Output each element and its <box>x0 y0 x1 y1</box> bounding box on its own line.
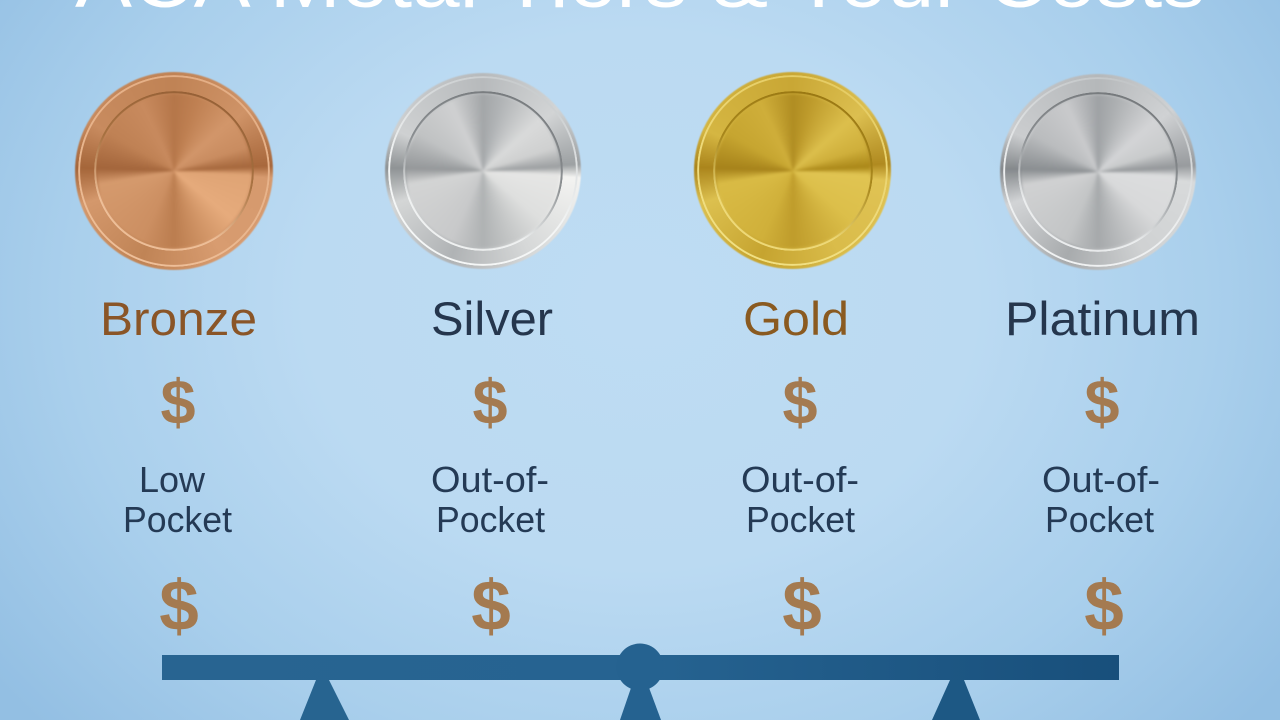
tier name: Platinum: Platinum <box>1005 292 1200 345</box>
right support <box>932 680 980 720</box>
cost label: Platinum: Pocket <box>1045 499 1154 540</box>
premium dollar: Bronze: $ <box>160 368 196 438</box>
premium dollar: Silver: $ <box>472 368 508 438</box>
tier name: Silver: Silver <box>431 292 553 345</box>
tier name: Bronze: Bronze <box>100 292 257 345</box>
coin: silver <box>384 72 582 270</box>
cost label: Platinum: Out-of- <box>1042 459 1160 500</box>
premium dollar: Gold: $ <box>782 368 818 438</box>
premium dollar: Platinum: $ <box>1084 368 1120 438</box>
cost label: Bronze: Pocket <box>123 499 232 540</box>
scale dollar: Silver: $ <box>471 567 511 646</box>
cost label: Silver <box>431 459 549 540</box>
cost label: Silver: Pocket <box>436 499 545 540</box>
coin: bronze <box>74 71 274 271</box>
left support <box>300 680 349 720</box>
cost label: Gold: Out-of- <box>741 459 859 500</box>
cost label: Gold: Pocket <box>746 499 855 540</box>
cost label: Gold <box>741 459 859 540</box>
coin: platinum <box>1000 74 1196 270</box>
tier name: Gold: Gold <box>743 292 849 345</box>
cost label: Bronze <box>123 459 232 540</box>
center pivot <box>616 644 664 720</box>
cost label: Platinum <box>1042 459 1160 540</box>
coin: gold <box>693 71 892 270</box>
beam <box>162 655 1119 680</box>
balance scale <box>162 644 1119 720</box>
scale dollar: Bronze: $ <box>159 567 199 646</box>
cost label: Silver: Out-of- <box>431 459 549 500</box>
scale dollar: Platinum: $ <box>1084 567 1124 646</box>
cost label: Bronze: Low <box>139 459 206 500</box>
scale dollar: Gold: $ <box>782 567 822 646</box>
